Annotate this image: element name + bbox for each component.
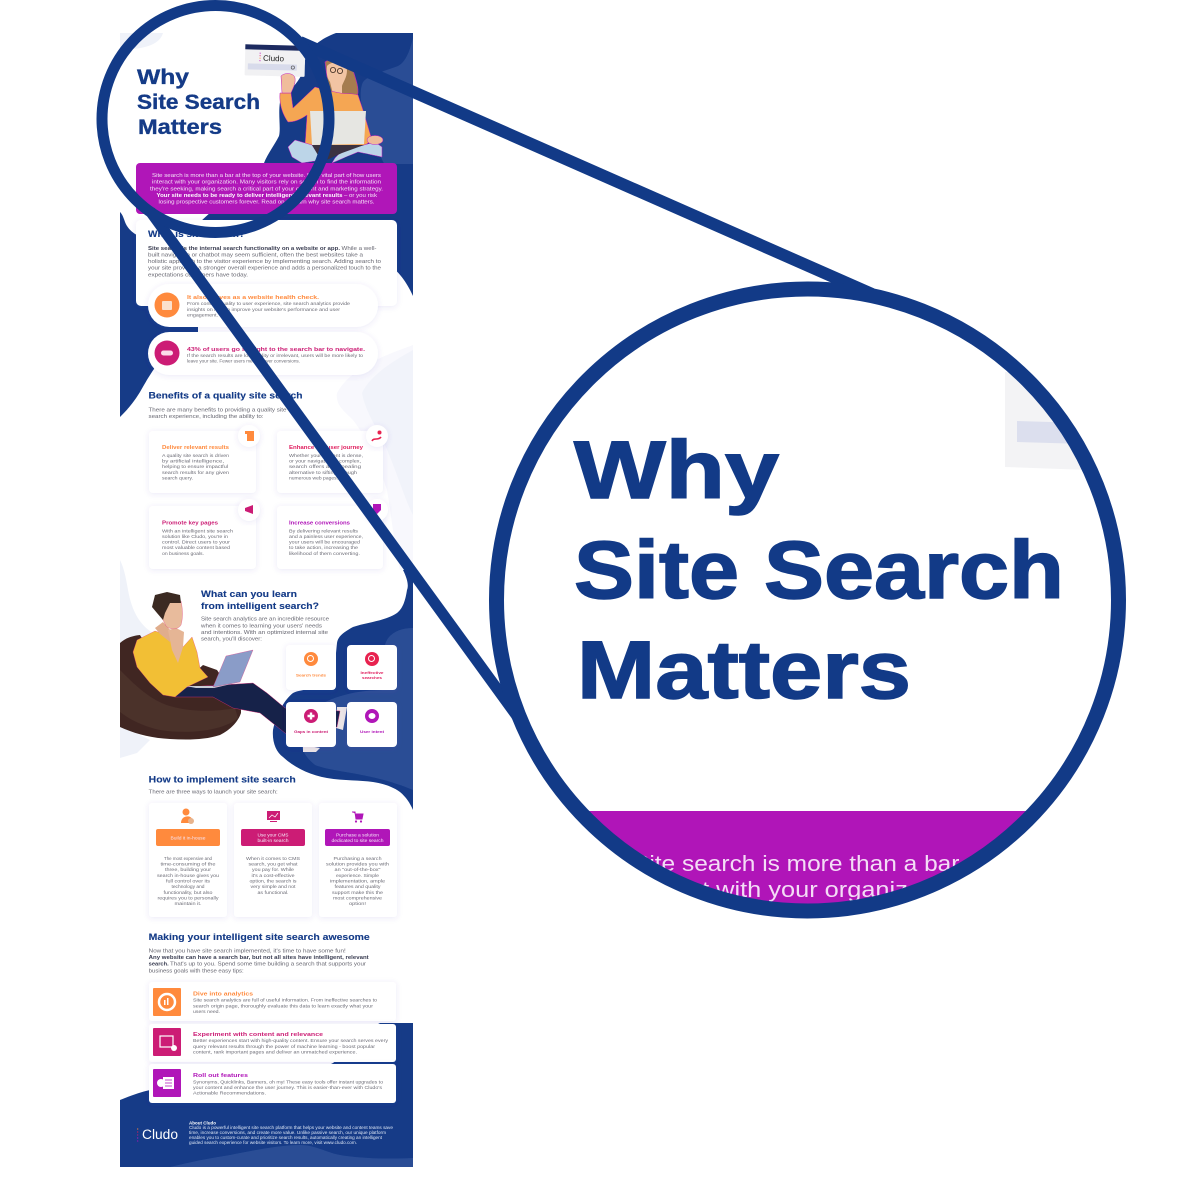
option card: CMS built-in: option, the search is	[250, 879, 297, 884]
magnified title: Why	[574, 425, 779, 516]
card: promote key pages: solution like Cludo, you're in	[162, 534, 228, 539]
footer about text	[189, 1120, 394, 1145]
option card: purchase a solution: dedicated to site search	[332, 838, 384, 843]
option card: build in-house	[149, 803, 227, 917]
hero search card: Cludo	[263, 54, 285, 63]
laptop base	[186, 682, 240, 688]
learn card: user intent	[347, 702, 397, 747]
magnified purple panel	[470, 811, 1150, 941]
option card: CMS built-in: as functional.	[258, 890, 288, 895]
option card: CMS built-in: built-in search	[258, 838, 289, 843]
hero search card	[245, 44, 305, 77]
card: enhance the user journey: alternative to sifting through	[289, 470, 357, 475]
hand and forearm	[168, 628, 184, 663]
tip: roll out features	[149, 1064, 396, 1103]
intro panel: they're seeking, making search a critical part of your content and marketing strategy.	[150, 186, 383, 192]
section heading: how to implement: There are three ways to launch your site search:	[149, 790, 278, 796]
option card: purchase a solution	[319, 803, 397, 917]
panel: what is site search: holistic approach to the visitor experience by implementing search. Adding search to	[148, 259, 381, 265]
card: increase conversions: likelihood of them converting.	[289, 551, 360, 556]
hero illustration: woman with laptop	[280, 58, 384, 163]
hair	[324, 60, 358, 95]
option card: purchase a solution: implementation, ample	[330, 879, 385, 884]
card: increase conversions: and a painless user experience,	[289, 534, 363, 539]
option card: build in-house: requires you to personally	[158, 895, 219, 900]
card: deliver relevant results: A quality site search is driven	[162, 453, 229, 458]
card: promote key pages: control. Direct users to your	[162, 540, 231, 544]
card: deliver relevant results	[149, 425, 260, 493]
background: footer navy shape	[120, 1023, 413, 1167]
hero title: Site Search	[137, 91, 260, 114]
option card: build in-house: search in-house gives you	[157, 873, 219, 878]
section heading: what can you learn: and intentions. With an optimized internal site	[201, 630, 328, 636]
panel: what is site search	[136, 220, 397, 306]
option card: purchase a solution: experience. Simple	[336, 873, 379, 878]
background: lighter blue on middle blob	[300, 628, 413, 790]
option card: purchase a solution: solution provides you with	[326, 862, 389, 867]
tip: experiment with content: Experiment with content and relevance	[193, 1032, 323, 1038]
option card: build in-house: time-consuming of the	[160, 862, 216, 867]
panel: what is site search: expectations customers have today.	[148, 272, 248, 278]
tip: roll out features: your content and enhance the user journey. This is easier-than-ever with Cludo's	[193, 1085, 383, 1090]
card: deliver relevant results: search results for any given	[162, 470, 229, 475]
callout: 43 percent of users: If the search results are low quality or irrelevant, users will be more likely to	[187, 353, 363, 358]
footer about text: Cludo is a powerful intelligent site search platform that helps your website and content teams save	[189, 1125, 394, 1130]
tip: experiment with content: query relevant results through the power of machine learning - boost popular	[193, 1044, 376, 1049]
hand on knee	[367, 136, 383, 144]
panel: what is site search: While a well-	[342, 246, 377, 252]
tip: roll out features: Roll out features	[193, 1073, 248, 1079]
jeans right	[332, 142, 382, 163]
beanbag	[120, 635, 241, 740]
neck	[155, 622, 172, 642]
laptop screen	[213, 650, 253, 687]
tip: dive into analytics: Dive into analytics	[193, 992, 253, 998]
section heading: what can you learn: from intelligent search?	[201, 601, 319, 612]
section heading: making search awesome: Making your intelligent site search awesome	[149, 932, 370, 943]
small magnifier ring	[102, 6, 329, 232]
learn card: search trends	[286, 645, 336, 690]
card: increase conversions: your users will be encouraged	[289, 540, 360, 544]
option card: CMS built-in: very simple and not	[250, 884, 296, 889]
callout: 43 percent of users: 43% of users go straight to the search bar to navigate.	[187, 347, 366, 353]
section heading: what can you learn: search, you'll discover:	[201, 636, 262, 642]
glasses	[330, 67, 343, 74]
left sleeve and sweater body	[280, 87, 372, 146]
callout: website health check	[148, 292, 378, 328]
footer about text: time, increase conversions, and create more value. Unlike passive search, our unique platform	[189, 1130, 386, 1135]
learn card: ineffective searches: searches	[362, 675, 383, 680]
section heading: what can you learn: What can you learn	[201, 589, 297, 600]
option card: purchase a solution: option!	[349, 901, 366, 906]
section heading: making search awesome: Any website can have a search bar, but not all sites have intelligent, relevant	[149, 955, 369, 961]
option card: CMS built-in: search, you get what	[248, 862, 298, 867]
option card: purchase a solution: an "out-of-the-box"	[334, 867, 381, 872]
callout: 43 percent of users	[148, 332, 378, 375]
section heading: what can you learn: when it comes to learning your users' needs	[201, 623, 322, 629]
background: pale corner blob	[120, 33, 163, 49]
infographic page	[120, 33, 413, 1167]
learn card: gaps in content	[286, 702, 336, 747]
card: enhance the user journey: or your navigation is complex,	[289, 458, 361, 463]
section heading: making search awesome	[149, 932, 370, 974]
panel: what is site search: your site provides a stronger overall experience and adds a personalized touch to the	[148, 266, 381, 272]
learn card: ineffective searches: Ineffective	[360, 670, 384, 675]
magnified view	[470, 289, 1200, 941]
face	[162, 601, 182, 629]
card: enhance the user journey	[277, 425, 388, 493]
card: enhance the user journey: Whether your content is dense,	[289, 453, 363, 458]
option card: CMS built-in: When it comes to CMS	[246, 856, 300, 861]
card: enhance the user journey: search offers an appealing	[289, 464, 361, 469]
connector line: lower	[150, 211, 530, 734]
section heading: making search awesome: Now that you have site search implemented, it's time to have some fun!	[149, 948, 346, 954]
big magnifier ring	[496, 289, 1118, 911]
learn card: ineffective searches	[347, 645, 397, 690]
section heading: benefits: search experience, including the ability to:	[148, 414, 264, 420]
tip: dive into analytics	[149, 982, 396, 1021]
section heading: how to implement: How to implement site search	[149, 774, 296, 786]
option card: purchase a solution: Purchasing a search	[334, 856, 382, 861]
intro panel: interact with your organization. Many visitors rely on search to find the information	[152, 180, 381, 186]
tip: roll out features: Actionable Recommendations.	[193, 1091, 266, 1096]
option card: build in-house: three, building your	[165, 867, 211, 872]
footer about text: enables you to custom-curate and prioritize search results, automatically creating an intelligent	[189, 1135, 383, 1140]
option card: build in-house: maintain it.	[174, 901, 202, 906]
card: increase conversions: to take action, increasing the	[289, 545, 358, 550]
panel: what is site search: Site search is the internal search functionality on a website or app.	[148, 246, 341, 252]
face and neck	[327, 63, 347, 94]
option card: purchase a solution: Purchase a solution	[336, 833, 379, 838]
magnified intro text	[626, 851, 1200, 902]
card: increase conversions: By delivering relevant results	[289, 528, 359, 534]
card: deliver relevant results: helping to ensure impactful	[162, 464, 228, 469]
dark lap	[312, 145, 364, 160]
magnified title: Site Search	[574, 525, 1064, 616]
magnified title: Matters	[577, 625, 911, 716]
callout: website health check: From content quality to user experience, site search analytics provide	[187, 301, 350, 306]
footer logo: Cludo	[142, 1127, 178, 1142]
option card: purchase a solution: most comprehensive	[333, 895, 382, 900]
section heading: making search awesome: business goals with these easy tips:	[149, 968, 244, 974]
tip: roll out features: Synonyms, Quicklinks, Banners, oh my! These easy tools offer instant upgrades to	[193, 1080, 383, 1084]
magnified search card	[1005, 372, 1145, 472]
intro panel: losing prospective customers forever. Read on to learn why site search matters.	[158, 200, 374, 206]
option card: purchase a solution: features and quality	[334, 884, 381, 889]
sweater	[133, 631, 208, 697]
option card: build in-house: Build it in-house	[170, 836, 206, 840]
section heading: benefits	[148, 390, 303, 420]
magnified title	[574, 425, 1064, 716]
section heading: benefits: There are many benefits to providing a quality site	[148, 408, 287, 414]
callout: website health check: insights on how to improve your website's performance and user	[187, 307, 341, 312]
legs	[175, 683, 340, 738]
section heading: making search awesome: That's up to you. Spend some time building a search that supports your	[170, 962, 366, 968]
option card: CMS built-in: you pay for. While	[252, 867, 294, 872]
background: footer lighter wave	[170, 1145, 413, 1167]
option card: build in-house: full control over its	[166, 879, 211, 884]
option card: CMS built-in	[234, 803, 312, 917]
learn card: user intent: User intent	[360, 729, 385, 734]
option card: CMS built-in: it's a cost-effective	[252, 873, 295, 878]
connector line: upper	[300, 42, 872, 294]
shoes	[336, 707, 347, 730]
tip: dive into analytics: users need.	[193, 1009, 220, 1014]
tip: experiment with content	[149, 1024, 396, 1062]
intro panel: Site search is more than a bar at the top of your website. It's a vital part of how users	[152, 173, 381, 179]
card: deliver relevant results: by artificial intelligence,	[162, 458, 224, 463]
tip: experiment with content: Better experiences start with high-quality content. Ensure your search serves every	[193, 1038, 389, 1043]
background: lighter blue top right shape	[361, 38, 413, 164]
background: pale shape left upper	[120, 560, 153, 645]
card: deliver relevant results: Deliver relevant results	[162, 445, 229, 451]
learn card: search trends: Search trends	[296, 672, 327, 677]
intro panel: Your site needs to be ready to deliver intelligent, relevant results	[156, 193, 343, 199]
option card: build in-house: functionality, but also	[164, 890, 213, 895]
card: promote key pages: Promote key pages	[162, 520, 218, 526]
background: pale shape left lower	[120, 725, 150, 758]
section heading: making search awesome: search.	[149, 962, 169, 968]
intro panel	[136, 163, 397, 214]
callout: 43 percent of users: leave your site. Fewer users means fewer conversions.	[187, 358, 300, 364]
tip: experiment with content: content, rank important pages and deliver an unmatched experience.	[193, 1050, 357, 1055]
tip: dive into analytics: search origin page, thoroughly evaluate this data to learn exactly what your	[193, 1004, 374, 1008]
jeans left	[288, 140, 322, 163]
card: deliver relevant results: search query.	[162, 475, 193, 480]
panel: what is site search: built navigation or chatbot may seem sufficient, often the best websites take a	[148, 253, 363, 259]
hero title: Matters	[138, 116, 222, 139]
option card: purchase a solution: support make this the	[332, 890, 383, 895]
section heading: benefits: Benefits of a quality site search	[148, 390, 303, 402]
background: white hero blob	[120, 33, 336, 238]
footer about text: guided search experience for website visitors. To learn more, visit www.cludo.com.	[189, 1140, 357, 1145]
callout: website health check: It also serves as a website health check.	[187, 295, 320, 301]
tip: dive into analytics: Site search analytics are full of useful information. From ineffective searches to	[193, 998, 377, 1003]
option card: build in-house: The most expensive and	[164, 856, 212, 861]
footer about text: About Cludo	[189, 1120, 216, 1126]
section heading: how to implement	[149, 774, 296, 796]
card: promote key pages: most valuable content based	[162, 545, 230, 550]
card: promote key pages: on business goals.	[162, 551, 204, 556]
beanbag highlight	[120, 670, 238, 732]
background: top navy shape	[120, 33, 413, 417]
callout: website health check: engagement.	[187, 313, 218, 318]
card: promote key pages	[149, 499, 260, 569]
background: pale outer shape right	[337, 345, 413, 570]
background: middle navy blob	[273, 570, 413, 810]
card: enhance the user journey: Enhance the user journey	[289, 445, 363, 451]
hair	[152, 592, 181, 620]
card: enhance the user journey: numerous web pages.	[289, 475, 338, 480]
navy hill	[337, 153, 384, 163]
panel: what is site search: What is site search?	[148, 229, 245, 240]
card: increase conversions	[277, 499, 388, 569]
background: pale inner shape right	[362, 350, 413, 515]
laptop	[310, 111, 366, 145]
section heading: what can you learn	[201, 589, 329, 642]
hero title	[137, 66, 260, 139]
raised hand	[281, 74, 295, 93]
card: increase conversions: Increase conversions	[289, 520, 350, 526]
section heading: what can you learn: Site search analytics are an incredible resource	[201, 617, 329, 623]
illustration: man on beanbag with laptop	[120, 592, 347, 752]
intro panel: – or you risk	[344, 193, 377, 199]
card: promote key pages: With an intelligent site search	[162, 528, 233, 534]
learn card: gaps in content: Gaps in content	[294, 729, 329, 734]
option card: build in-house: technology and	[172, 884, 205, 889]
hero title: Why	[137, 66, 190, 89]
option card: CMS built-in: Use your CMS	[258, 833, 288, 838]
